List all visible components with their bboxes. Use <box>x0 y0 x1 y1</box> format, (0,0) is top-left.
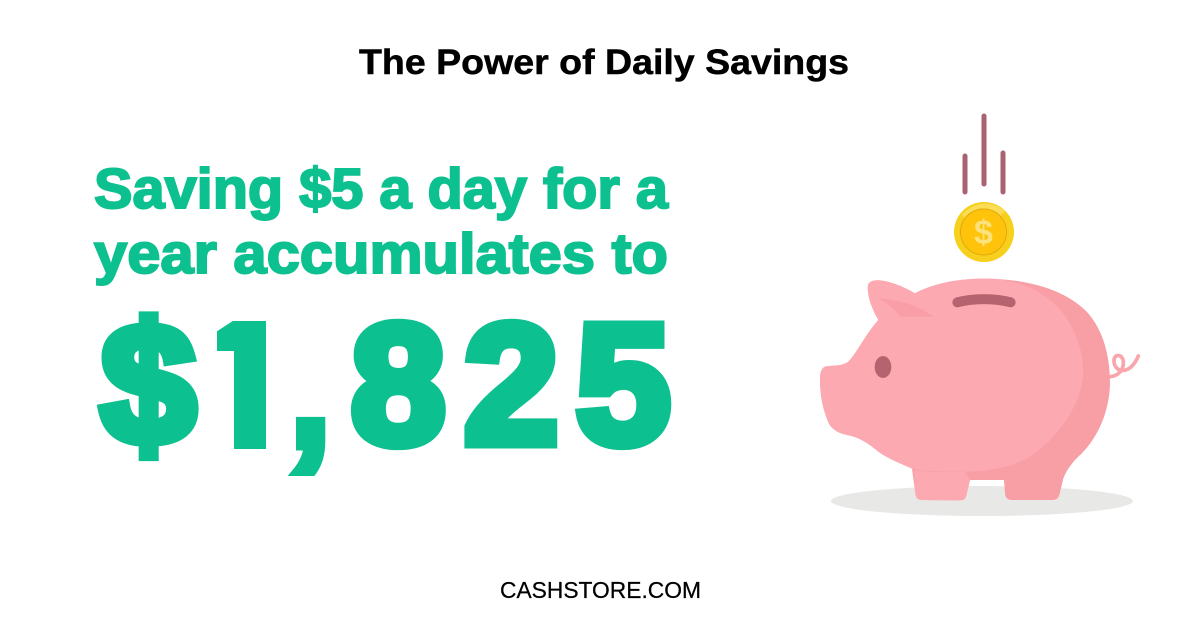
big number: $1,825: , <box>286 297 332 481</box>
pig front leg <box>914 470 970 500</box>
headline text <box>94 157 669 286</box>
pig tail <box>1110 355 1138 377</box>
icon: piggy bank <box>820 279 1138 500</box>
pig body highlight <box>820 279 1083 472</box>
big number: $1,825: 5 <box>576 290 671 480</box>
icon: falling motion lines <box>965 116 1003 192</box>
icon: gold coin <box>954 202 1014 262</box>
headline text: year accumulates to <box>94 222 668 286</box>
footer source: CASHSTORE.COM <box>500 577 701 603</box>
pig eye <box>875 356 891 378</box>
big number: $1,825: $ <box>101 290 196 480</box>
pig ear fold <box>878 298 933 317</box>
headline text: Saving $5 a day for a <box>94 157 669 221</box>
big number: $1,825: 8 <box>351 290 446 480</box>
icon: ground shadow <box>831 486 1133 516</box>
pig coin slot <box>957 299 1011 302</box>
icon: gold coin: $ <box>974 214 993 252</box>
big number: $1,825: 2 <box>464 290 559 480</box>
title: The Power of Daily Savings <box>359 43 849 82</box>
big number: $1,825: 1 <box>197 290 292 480</box>
pig body <box>820 279 1110 500</box>
